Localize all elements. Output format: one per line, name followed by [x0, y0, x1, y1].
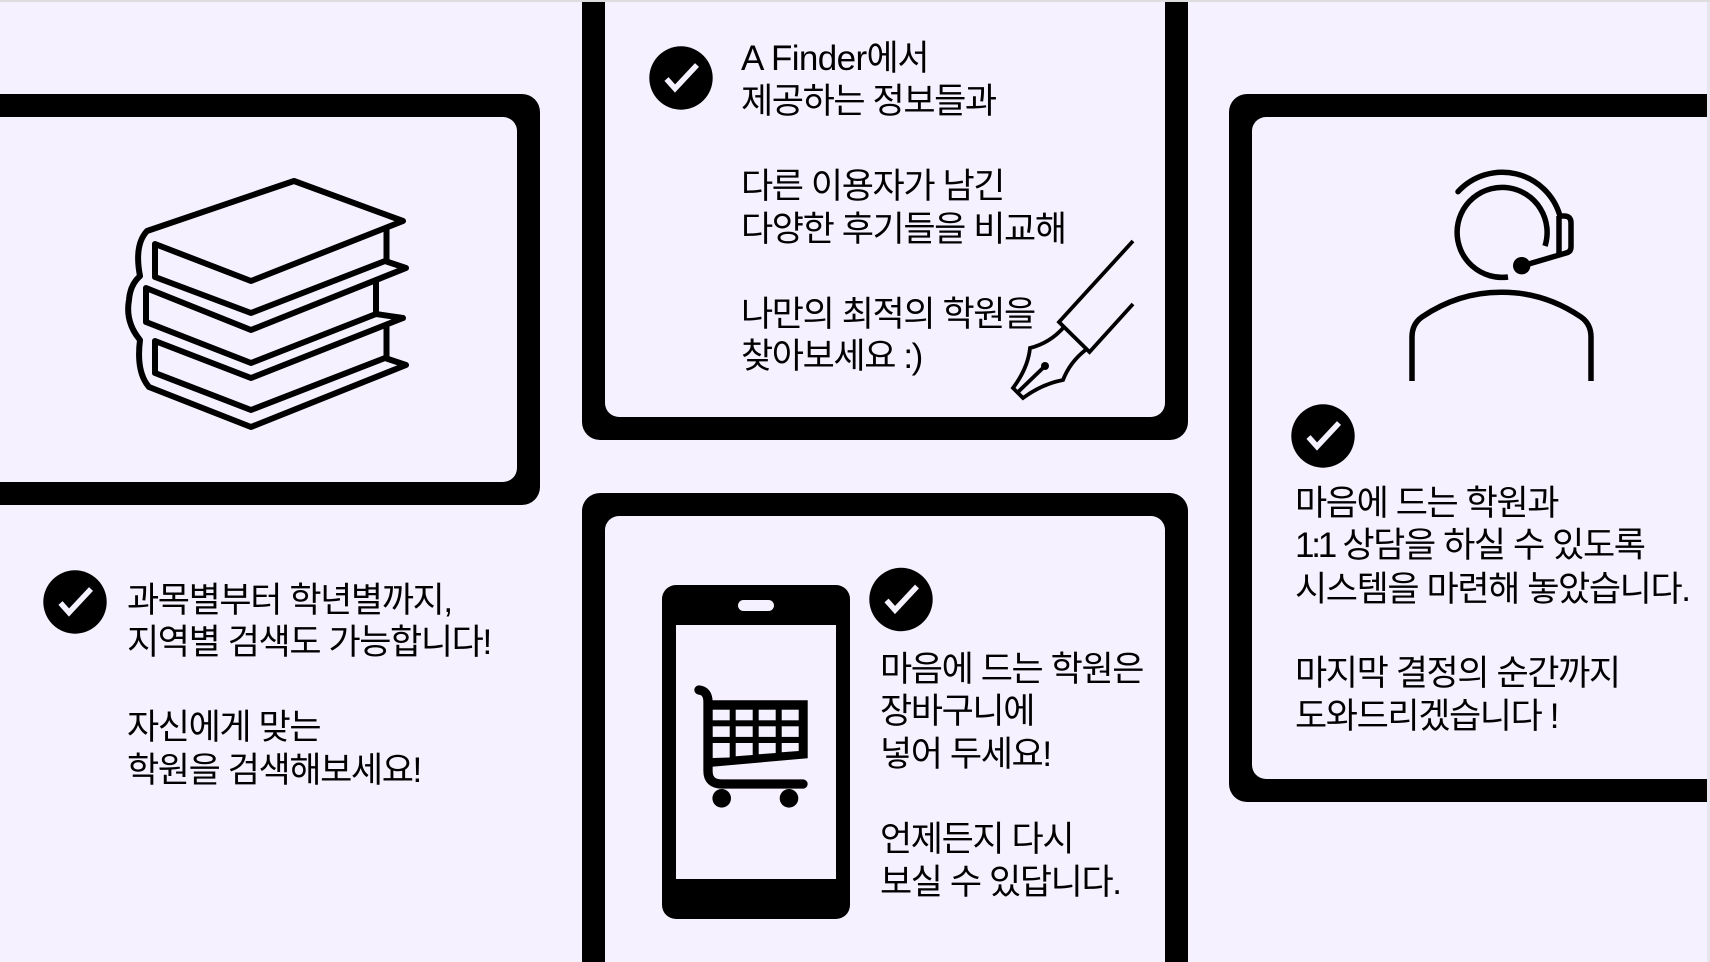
text: middle top description: A Finder에서 — [741, 39, 928, 78]
text: middle top description: 다양한 후기들을 비교해 — [741, 210, 1066, 249]
text: middle bottom description: 보실 수 있답니다. — [880, 863, 1121, 902]
text: middle top description: 다른 이용자가 남긴 — [741, 167, 1004, 206]
text: middle bottom description: 마음에 드는 학원은 — [880, 650, 1143, 689]
text: right description: 시스템을 마련해 놓았습니다. — [1295, 570, 1690, 609]
check icon: middle top — [649, 46, 713, 110]
icon: stack of books — [128, 181, 406, 427]
text: middle bottom description: 언제든지 다시 — [880, 820, 1073, 859]
text: left description: 지역별 검색도 가능합니다! — [127, 623, 491, 662]
text: left description — [127, 581, 491, 790]
check icon: right — [1291, 404, 1355, 468]
text: left description: 과목별부터 학년별까지, — [127, 581, 452, 620]
text: middle bottom description — [880, 650, 1143, 902]
text: right description: 마음에 드는 학원과 — [1295, 484, 1559, 523]
panel: middle bottom frame — [582, 493, 1188, 962]
text: left description: 자신에게 맞는 — [127, 708, 320, 747]
panel: left book frame — [0, 94, 540, 505]
check icon: middle bottom — [869, 568, 933, 631]
text: middle top description: 찾아보세요 :) — [741, 337, 922, 376]
panel: middle top frame — [582, 2, 1188, 440]
text: right description: 도와드리겠습니다 ! — [1295, 697, 1558, 736]
check icon: left — [43, 570, 107, 634]
icon: fountain pen — [1013, 241, 1133, 398]
text: middle bottom description: 장바구니에 — [880, 692, 1034, 731]
text: left description: 학원을 검색해보세요! — [127, 751, 421, 790]
text: middle top description: 제공하는 정보들과 — [741, 82, 997, 121]
text: middle top description — [741, 39, 1066, 376]
text: middle bottom description: 넣어 두세요! — [880, 735, 1051, 774]
text: right description: 1:1 상담을 하실 수 있도록 — [1295, 526, 1645, 565]
icon: phone with shopping cart — [662, 585, 850, 919]
panel: right frame — [1229, 94, 1707, 802]
icon: person with headset — [1412, 172, 1591, 381]
text: right description: 마지막 결정의 순간까지 — [1295, 654, 1620, 693]
text: middle top description: 나만의 최적의 학원을 — [741, 295, 1035, 334]
text: right description — [1295, 484, 1690, 736]
